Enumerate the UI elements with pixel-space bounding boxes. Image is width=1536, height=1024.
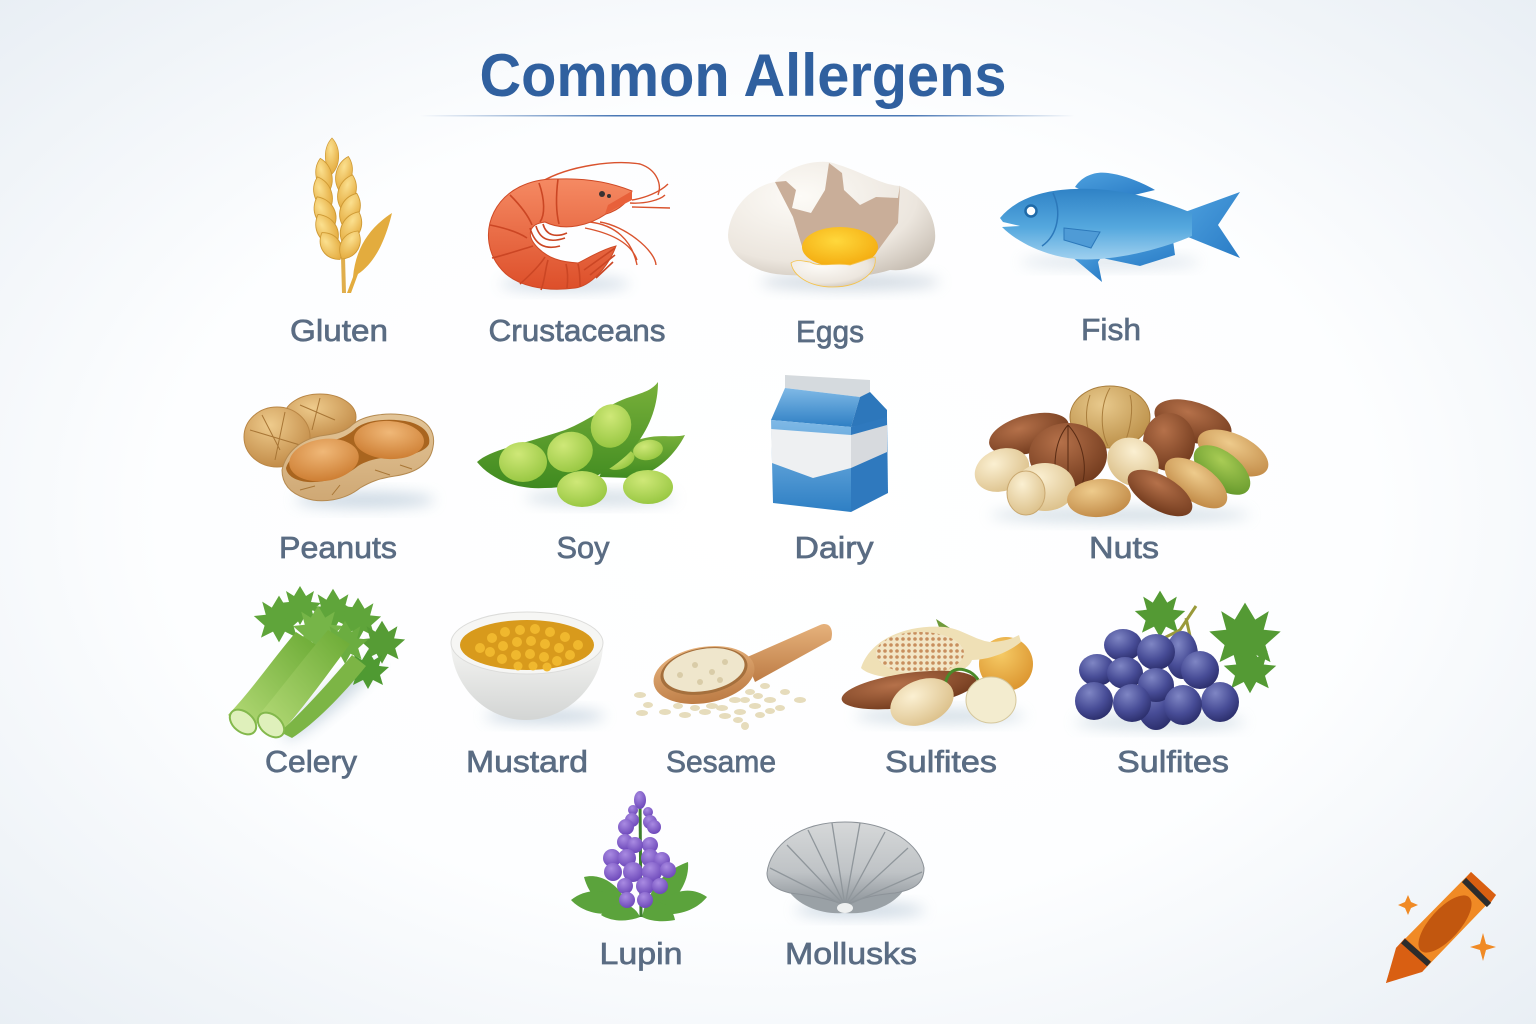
icon: sesame spoon xyxy=(634,624,832,730)
label: Nuts: Nuts xyxy=(1089,530,1159,565)
icon: grapes xyxy=(1075,591,1281,730)
label: Eggs: Eggs xyxy=(796,314,864,349)
label: Peanuts: Peanuts xyxy=(279,530,397,565)
icon: mixed nuts xyxy=(969,386,1275,526)
label: Sulfites: Sulfites xyxy=(1117,744,1229,779)
icon: celery xyxy=(225,586,405,746)
icon: sparkles xyxy=(1398,895,1496,961)
label: Mollusks: Mollusks xyxy=(785,936,917,971)
icon: fish xyxy=(1000,173,1240,282)
label: Mustard: Mustard xyxy=(466,744,588,779)
label: Lupin: Lupin xyxy=(600,936,682,971)
icon: mollusk shell xyxy=(767,822,925,917)
label: Gluten: Gluten xyxy=(290,313,388,348)
label: Sulfites: Sulfites xyxy=(885,744,997,779)
icon: shrimp xyxy=(488,163,670,291)
label: Fish: Fish xyxy=(1081,312,1141,347)
icon: milk carton xyxy=(771,375,888,512)
icon: crayon logo xyxy=(1386,872,1496,983)
label: Celery: Celery xyxy=(265,744,357,779)
icon: mustard bowl xyxy=(451,612,605,723)
label: Soy: Soy xyxy=(556,530,610,565)
icon: wheat xyxy=(308,138,392,293)
title: Common Allergens xyxy=(480,42,1006,109)
icon: peanuts xyxy=(244,394,435,508)
label: Sesame: Sesame xyxy=(666,744,776,779)
icon: soybeans xyxy=(477,382,685,507)
label: Dairy: Dairy xyxy=(794,530,874,565)
icon: cracked egg xyxy=(728,162,940,290)
label: Crustaceans: Crustaceans xyxy=(488,313,666,348)
icon: lupin flower xyxy=(571,791,707,921)
icon: sulfites foods xyxy=(839,619,1033,735)
title underline xyxy=(420,115,1075,116)
